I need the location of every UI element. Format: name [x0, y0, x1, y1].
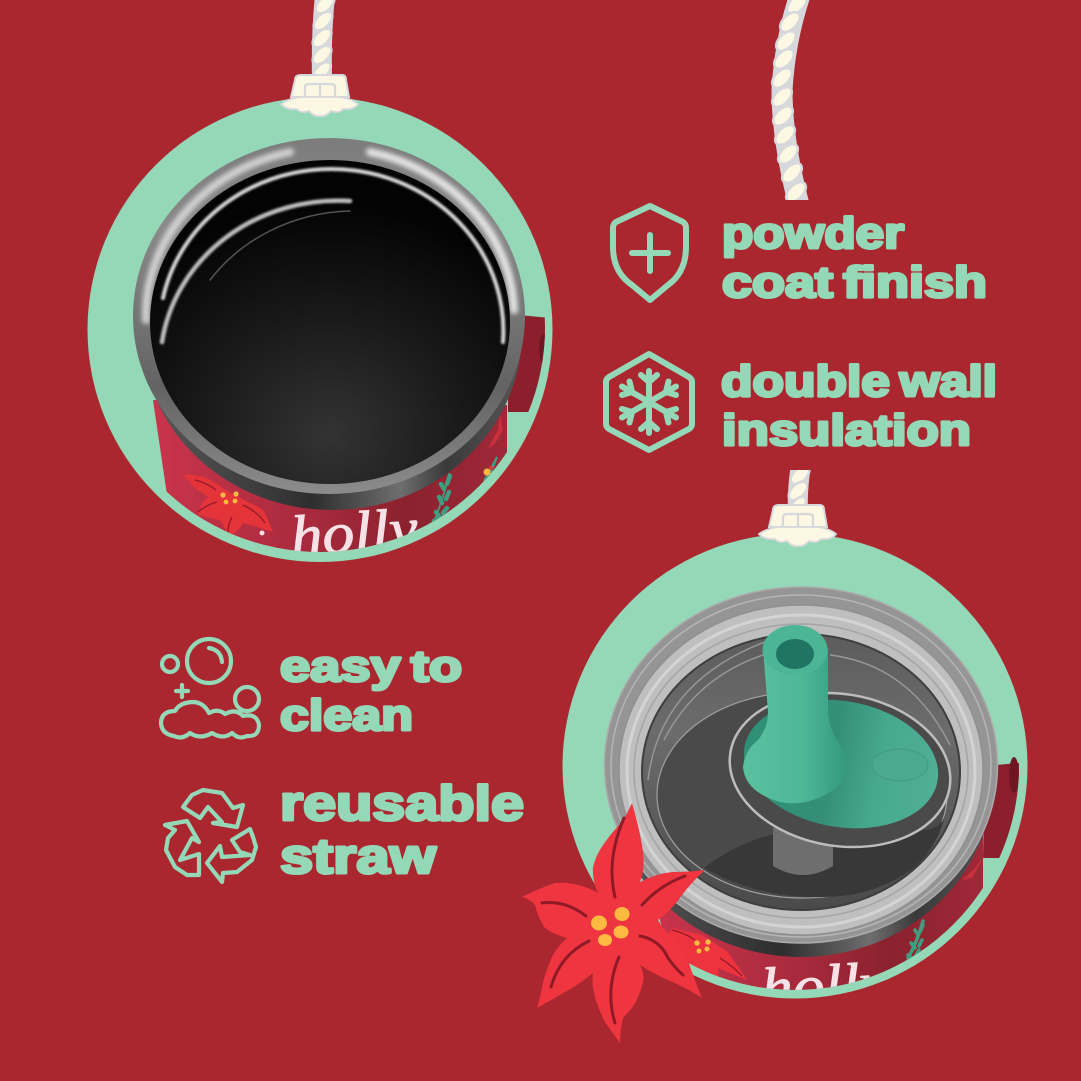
band flower centre	[694, 939, 711, 954]
tumbler interior	[150, 160, 510, 484]
rope: top right	[769, 0, 810, 205]
ornament cap	[281, 75, 358, 116]
band flower right	[484, 457, 497, 481]
lid floor shadow	[704, 815, 945, 897]
tumbler band	[153, 400, 507, 552]
poinsettia flower	[522, 803, 705, 1043]
text: reusable straw	[280, 777, 524, 884]
band sprig	[433, 474, 450, 524]
text: powder coat finish: powder	[722, 209, 904, 258]
ornament disc	[88, 97, 552, 562]
feature: reusable straw	[165, 777, 524, 884]
straw hole	[776, 639, 814, 669]
icon: recycle arrows	[165, 790, 256, 882]
tumbler handle	[983, 757, 1019, 858]
ornament: tumbler lid with straw	[562, 462, 1030, 1021]
dot	[260, 530, 264, 536]
text: easy to clean	[280, 642, 462, 740]
ornament: tumbler interior	[88, 0, 552, 570]
tumbler collar	[609, 599, 993, 957]
lid rim rings	[611, 595, 991, 937]
text: easy to clean: clean	[280, 691, 413, 740]
holly lettering: holly	[759, 949, 890, 1021]
text: double wall insulation	[721, 357, 997, 455]
text: reusable straw: reusable	[280, 777, 524, 831]
text: double wall insulation: double wall	[721, 357, 997, 406]
text: double wall insulation: insulation	[722, 406, 971, 455]
straw stem and base flare	[743, 648, 847, 803]
band sprig	[908, 921, 923, 958]
feature: easy to clean	[161, 639, 462, 740]
lid centre ring	[718, 678, 962, 862]
text: powder coat finish	[722, 209, 987, 307]
interior highlights	[162, 169, 503, 342]
flower centre	[591, 907, 630, 946]
rope	[311, 0, 336, 74]
straw stem below lid	[773, 828, 833, 875]
holly lettering: holly	[288, 495, 420, 569]
well upper arcs	[648, 640, 950, 780]
band flower top right	[488, 414, 503, 448]
text: easy to clean: easy to	[280, 642, 462, 691]
band small leaf	[962, 855, 985, 880]
tumbler band	[660, 835, 984, 990]
tumbler collar	[142, 154, 522, 510]
rim highlights	[146, 152, 514, 320]
band flower	[183, 475, 273, 537]
feature: double wall insulation	[606, 354, 997, 455]
feature: powder coat finish	[613, 206, 987, 307]
petals	[522, 803, 705, 1043]
icon: hexagon snowflake	[606, 354, 692, 450]
band flower	[669, 928, 747, 980]
icon: bubbles and foam	[161, 639, 259, 737]
straw mouth	[762, 625, 828, 675]
silicone stopper disc	[734, 685, 948, 843]
lid floor	[657, 692, 947, 898]
petal veins	[542, 818, 685, 1023]
rope	[787, 470, 811, 504]
lid rim	[604, 587, 998, 943]
text: powder coat finish: coat finish	[722, 258, 987, 307]
icon: shield with plus	[613, 206, 686, 300]
lid well	[642, 634, 960, 910]
band flower veins	[672, 930, 742, 976]
silicone stopper dimple	[872, 749, 928, 781]
tumbler handle	[508, 316, 545, 412]
ornament cap	[759, 505, 836, 546]
text: reusable straw: straw	[280, 830, 437, 884]
ornament disc	[562, 534, 1028, 998]
tumbler rim	[133, 138, 525, 494]
